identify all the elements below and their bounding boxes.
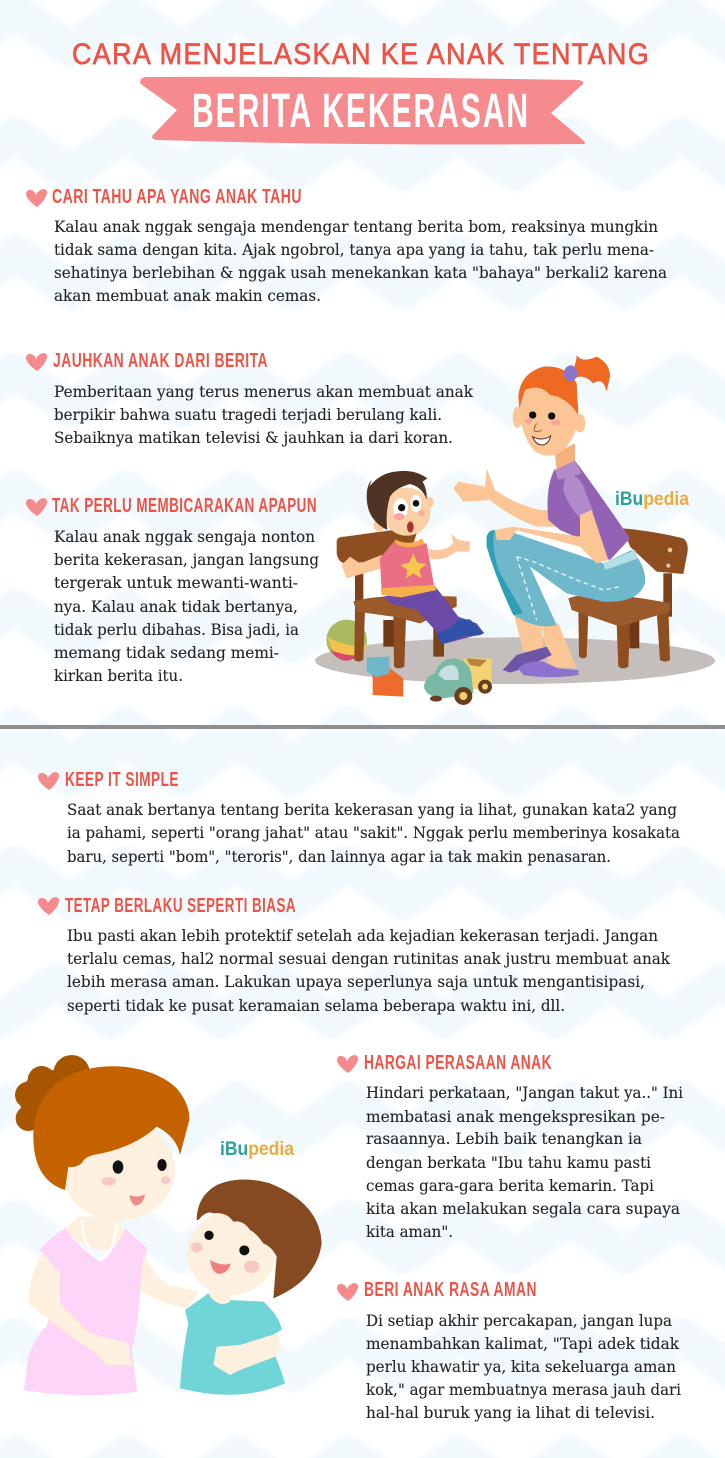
section: tetap berlaku <box>38 895 671 1015</box>
text block: beri rasa aman: kok," agar membuatnya merasa jauh dari <box>366 1381 681 1399</box>
text block: tetap berlaku <box>67 927 671 1015</box>
text block: cari tahu: sehatinya berlebihan & nggak usah menekankan kata "bahaya" berkali2 karena <box>54 264 667 282</box>
text block: beri rasa aman <box>366 1312 681 1422</box>
icon: heart <box>38 772 59 790</box>
text block: tak perlu: berita kekerasan, jangan langsung <box>54 551 319 569</box>
banner: berita kekerasan <box>140 77 585 144</box>
text block: jauhkan anak: Pemberitaan yang terus menerus akan membuat anak <box>54 383 474 401</box>
heading: hargai perasaan: HARGAI PERASAAN ANAK <box>364 1052 552 1074</box>
heading: tetap berlaku: TETAP BERLAKU SEPERTI BIASA <box>65 895 296 917</box>
toy blocks <box>367 657 403 697</box>
text block: jauhkan anak: berpikir bahwa suatu tragedi terjadi berulang kali. <box>54 406 442 424</box>
text block: keep it simple: baru, seperti "bom", "teroris", dan lainnya agar ia tak makin penasaran. <box>67 848 611 866</box>
divider <box>0 725 725 729</box>
logo: ibupedia 1: iBupedia <box>615 489 689 510</box>
text block: tetap berlaku: Ibu pasti akan lebih protektif setelah ada kejadian kekerasan terjadi. Jangan <box>67 927 658 945</box>
text block: tak perlu: tidak perlu dibahas. Bisa jadi, ia <box>54 621 299 639</box>
text block: beri rasa aman: hal-hal buruk yang ia lihat di televisi. <box>366 1404 655 1422</box>
icon: heart <box>38 897 59 915</box>
text block: hargai perasaan: kita aman". <box>366 1223 453 1241</box>
icon: heart <box>26 353 47 371</box>
text block: keep it simple <box>67 801 680 866</box>
text block: beri rasa aman: perlu khawatir ya, kita sekeluarga aman <box>366 1358 676 1376</box>
text block: beri rasa aman: Di setiap akhir percakapan, jangan lupa <box>366 1312 672 1330</box>
section: jauhkan anak <box>26 350 474 447</box>
toy truck <box>424 658 492 705</box>
logo: ibupedia 2: iBupedia <box>220 1139 294 1160</box>
icon: heart <box>26 189 47 207</box>
text block: hargai perasaan: cemas gara-gara berita kemarin. Tapi <box>366 1177 654 1195</box>
section: cari tahu <box>26 186 667 305</box>
text block: hargai perasaan: Hindari perkataan, "Jangan takut ya.." Ini <box>366 1084 683 1102</box>
heading: tak perlu: TAK PERLU MEMBICARAKAN APAPUN <box>52 495 317 517</box>
text block: cari tahu: akan membuat anak makin cemas. <box>54 287 321 305</box>
heading: jauhkan anak: JAUHKAN ANAK DARI BERITA <box>53 350 268 372</box>
text block: keep it simple: Saat anak bertanya tentang berita kekerasan yang ia lihat, gunakan kata2 yang <box>67 801 677 819</box>
text block: beri rasa aman: menambahkan kalimat, "Tapi adek tidak <box>366 1335 680 1353</box>
text block: cari tahu: tidak sama dengan kita. Ajak ngobrol, tanya apa yang ia tahu, tak perlu mena- <box>54 241 654 259</box>
text block: keep it simple: ia pahami, seperti "orang jahat" atau "sakit". Nggak perlu memberinya kosakata <box>67 824 680 842</box>
section: tak perlu <box>26 495 319 685</box>
floor shadow <box>315 637 715 684</box>
text block: hargai perasaan: rasaannya. Lebih baik tenangkan ia <box>366 1130 642 1148</box>
mother <box>453 355 645 677</box>
son <box>180 1180 322 1395</box>
text block: cari tahu <box>54 218 667 305</box>
text block: cari tahu: Kalau anak nggak sengaja mendengar tentang berita bom, reaksinya mungkin <box>54 218 658 236</box>
text block: hargai perasaan: kita akan melakukan segala cara supaya <box>366 1200 680 1218</box>
mother <box>15 1055 200 1395</box>
right chair <box>568 528 688 668</box>
child <box>342 471 484 644</box>
text block: tetap berlaku: seperti tidak ke pusat keramaian selama beberapa waktu ini, dll. <box>67 997 565 1015</box>
heading: cari tahu: CARI TAHU APA YANG ANAK TAHU <box>52 186 302 208</box>
title: CARA MENJELASKAN KE ANAK TENTANG <box>72 38 650 71</box>
section: keep it simple <box>38 769 680 866</box>
text block: hargai perasaan <box>366 1084 683 1241</box>
text block: tak perlu: kirkan berita itu. <box>54 667 183 685</box>
banner: berita kekerasan: BERITA KEKERASAN <box>192 85 530 138</box>
section: beri rasa aman <box>337 1279 681 1422</box>
illustration: mother and son <box>15 1055 322 1395</box>
small chair <box>337 530 457 668</box>
text block: tak perlu: nya. Kalau anak tidak bertanya, <box>54 598 298 616</box>
text block: tak perlu: tergerak untuk mewanti-wanti- <box>54 574 298 592</box>
heading: keep it simple: KEEP IT SIMPLE <box>65 769 179 791</box>
heading: beri rasa aman: BERI ANAK RASA AMAN <box>364 1279 537 1301</box>
text block: tetap berlaku: terlalu cemas, hal2 normal sesuai dengan rutinitas anak justru membuat anak <box>67 950 671 968</box>
text block: hargai perasaan: dengan berkata "Ibu tahu kamu pasti <box>366 1154 651 1172</box>
text block: tak perlu <box>54 528 319 685</box>
text block: jauhkan anak: Sebaiknya matikan televisi & jauhkan ia dari koran. <box>54 429 453 447</box>
illustration: mother and child on chairs <box>315 355 715 705</box>
text block: tetap berlaku: lebih merasa aman. Lakukan upaya seperlunya saja untuk mengantisipasi, <box>67 973 645 991</box>
text block: tak perlu: memang tidak sedang memi- <box>54 644 279 662</box>
ball <box>326 620 367 661</box>
icon: heart <box>337 1283 358 1301</box>
icon: heart <box>337 1055 358 1073</box>
text block: jauhkan anak <box>54 383 474 447</box>
text block: hargai perasaan: membatasi anak mengekspresikan pe- <box>366 1108 665 1126</box>
text block: tak perlu: Kalau anak nggak sengaja nonton <box>54 528 315 546</box>
section: hargai perasaan <box>337 1052 683 1241</box>
icon: heart <box>26 498 47 516</box>
